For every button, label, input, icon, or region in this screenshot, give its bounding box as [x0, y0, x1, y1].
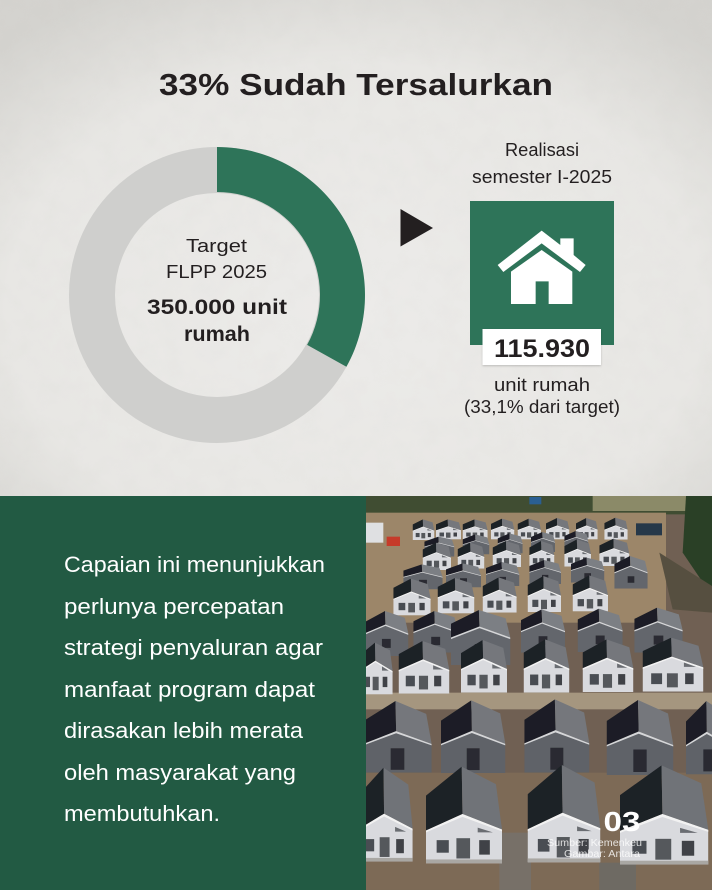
realisasi caption	[464, 375, 620, 417]
paragraph: manfaat program dapat	[64, 677, 315, 702]
realisasi caption: unit rumah	[494, 375, 590, 395]
realisasi heading	[472, 140, 612, 187]
donut centre label: Target	[186, 235, 247, 256]
paragraph: membutuhkan.	[64, 801, 220, 826]
row of houses 8	[424, 531, 588, 557]
source credit: Gambar: Antara	[564, 848, 640, 860]
icon: house	[498, 231, 586, 304]
realisasi heading: Realisasi	[505, 140, 579, 160]
donut centre label: FLPP 2025	[166, 261, 267, 282]
row of houses 4	[364, 608, 683, 665]
realisasi heading: semester I-2025	[472, 167, 612, 187]
paragraph: perlunya percepatan	[64, 594, 284, 619]
row of houses 3	[359, 638, 703, 694]
donut centre label	[147, 235, 287, 346]
row of houses 7	[423, 539, 629, 570]
photo: housing estate aerial view	[358, 496, 712, 890]
page background	[0, 0, 712, 496]
donut centre label: 350.000 unit	[147, 296, 287, 319]
row of houses 2	[363, 699, 712, 775]
value: 115.930	[482, 329, 601, 365]
arrow	[400, 209, 433, 246]
paragraph: strategi penyaluran agar	[64, 635, 323, 660]
paragraph: oleh masyarakat yang	[64, 760, 296, 785]
donut chart: target FLPP 2025	[92, 147, 365, 420]
realisasi caption: (33,1% dari target)	[464, 397, 620, 417]
row of houses 5	[393, 575, 608, 615]
paragraph: dirasakan lebih merata	[64, 718, 304, 743]
title: 33% Sudah Tersalurkan	[159, 67, 553, 102]
value: 115.930: 115.930	[494, 335, 590, 363]
donut centre label: rumah	[184, 323, 250, 346]
paragraph	[64, 552, 325, 826]
panel: green text panel	[0, 496, 366, 890]
source credit	[547, 837, 642, 860]
row of houses 6	[403, 556, 648, 589]
green box with house icon	[470, 201, 614, 345]
page number: 03	[604, 806, 640, 837]
row of houses 9	[413, 518, 628, 540]
donut segment: 33% realised	[217, 147, 365, 367]
row of houses 1	[358, 765, 708, 865]
paragraph: Capaian ini menunjukkan	[64, 552, 325, 577]
source credit: Sumber: Kemenkeu	[547, 837, 642, 849]
